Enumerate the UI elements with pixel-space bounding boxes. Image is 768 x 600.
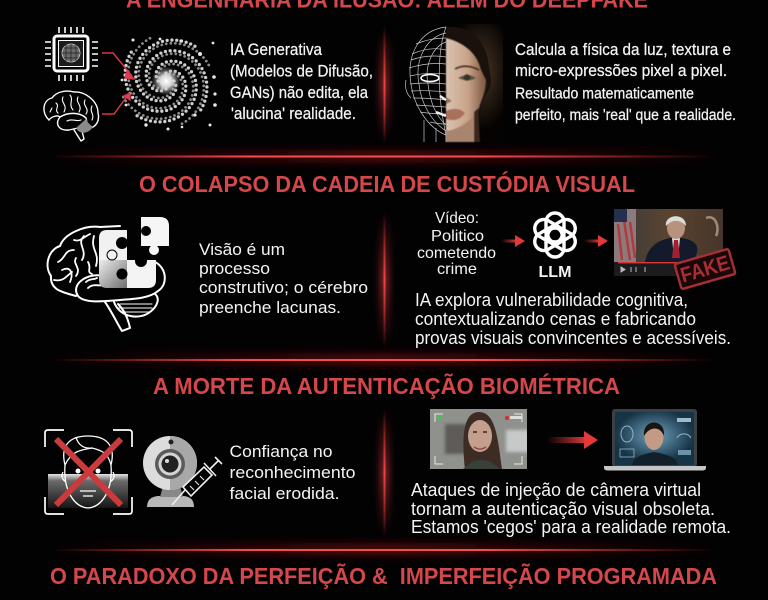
- text: perfect render: [515, 40, 736, 124]
- icon: particle spiral: [116, 31, 217, 131]
- text: video prompt: cometendo: [417, 245, 496, 262]
- panel: constructive vision: [48, 217, 368, 331]
- text: constructive vision: preenche lacunas.: [199, 298, 341, 317]
- panel: generative ai: [44, 27, 373, 141]
- text: fabricated proof: IA explora vulnerabilidade cognitiva,: [415, 290, 688, 310]
- text: constructive vision: Visão é um: [199, 240, 285, 259]
- text: perfect render: perfeito, mais 'real' que a realidade.: [515, 107, 736, 124]
- text: video prompt: Politico: [431, 228, 484, 245]
- divider: horizontal 3: [50, 546, 715, 553]
- image: woman webcam feed: [430, 409, 531, 469]
- panel: injection attack: [411, 409, 731, 537]
- text: injection attack: Ataques de injeção de câmera virtual: [411, 480, 701, 500]
- text: injection attack: tornam a autenticação visual obsoleta.: [411, 499, 715, 519]
- divider: vertical 1: [381, 25, 388, 145]
- stamp: fake: FAKE: [678, 252, 732, 287]
- text: biometric trust: [230, 442, 356, 503]
- text: generative ai: [230, 40, 373, 123]
- panel: biometric trust: [45, 430, 356, 514]
- text: biometric trust: reconhecimento: [230, 463, 356, 482]
- text: injection attack: [411, 480, 731, 537]
- divider: vertical 3: [381, 408, 388, 538]
- arrows: inputs to spiral: [102, 53, 134, 114]
- image: half wireframe face: [406, 24, 503, 142]
- text: perfect render: micro-expressões pixel a pixel.: [515, 61, 727, 80]
- text: constructive vision: [199, 240, 368, 317]
- text: fabricated proof: contextualizando cenas e fabricando: [415, 309, 696, 329]
- text: video prompt: crime: [437, 261, 477, 278]
- text: perfect render: Calcula a física da luz, textura e: [515, 40, 731, 59]
- divider: horizontal 1: [50, 153, 715, 160]
- icon: webcam with syringe: [143, 436, 222, 507]
- image: laptop face auth: [604, 409, 706, 470]
- text: generative ai: (Modelos de Difusão,: [230, 62, 373, 80]
- icon: puzzle brain: [48, 217, 169, 331]
- arrow: llm to video: [584, 235, 608, 247]
- panel: perfect render: [406, 24, 736, 142]
- text: generative ai: 'alucina' realidade.: [231, 104, 356, 123]
- divider: horizontal 2: [50, 356, 715, 363]
- text: generative ai: IA Generativa: [230, 40, 322, 59]
- arrow: prompt to llm: [501, 235, 525, 247]
- divider: vertical 2: [381, 212, 388, 348]
- icon: ai chip: [45, 27, 98, 81]
- text: video prompt: [417, 210, 496, 278]
- panel: fabricated proof: [415, 209, 735, 348]
- text: video prompt: Vídeo:: [435, 210, 479, 227]
- heading: colapso: O COLAPSO DA CADEIA DE CUSTÓDIA VISUAL: [139, 170, 635, 197]
- label: llm: LLM: [538, 264, 572, 281]
- text: constructive vision: construtivo; o cérebro: [199, 278, 368, 297]
- text: fabricated proof: [415, 290, 731, 348]
- text: biometric trust: facial erodida.: [230, 484, 340, 503]
- image: fake video: [614, 209, 723, 276]
- heading: morte: A MORTE DA AUTENTICAÇÃO BIOMÉTRICA: [153, 372, 620, 399]
- arrow: feed to laptop: [547, 431, 598, 449]
- text: fabricated proof: provas visuais convincentes e acessíveis.: [415, 328, 731, 348]
- text: biometric trust: Confiança no: [230, 442, 332, 461]
- text: generative ai: GANs) não edita, ela: [230, 83, 368, 102]
- text: perfect render: Resultado matematicamente: [515, 86, 694, 102]
- icon: face scan crossed: [45, 430, 132, 514]
- heading: paradoxo: O PARADOXO DA PERFEIÇÃO & IMPERFEIÇÃO PROGRAMADA: [50, 562, 717, 589]
- icon: line brain: [44, 91, 99, 141]
- text: injection attack: Estamos 'cegos' para a realidade remota.: [411, 517, 731, 537]
- icon: llm knot: [531, 213, 579, 257]
- text: constructive vision: processo: [199, 259, 270, 278]
